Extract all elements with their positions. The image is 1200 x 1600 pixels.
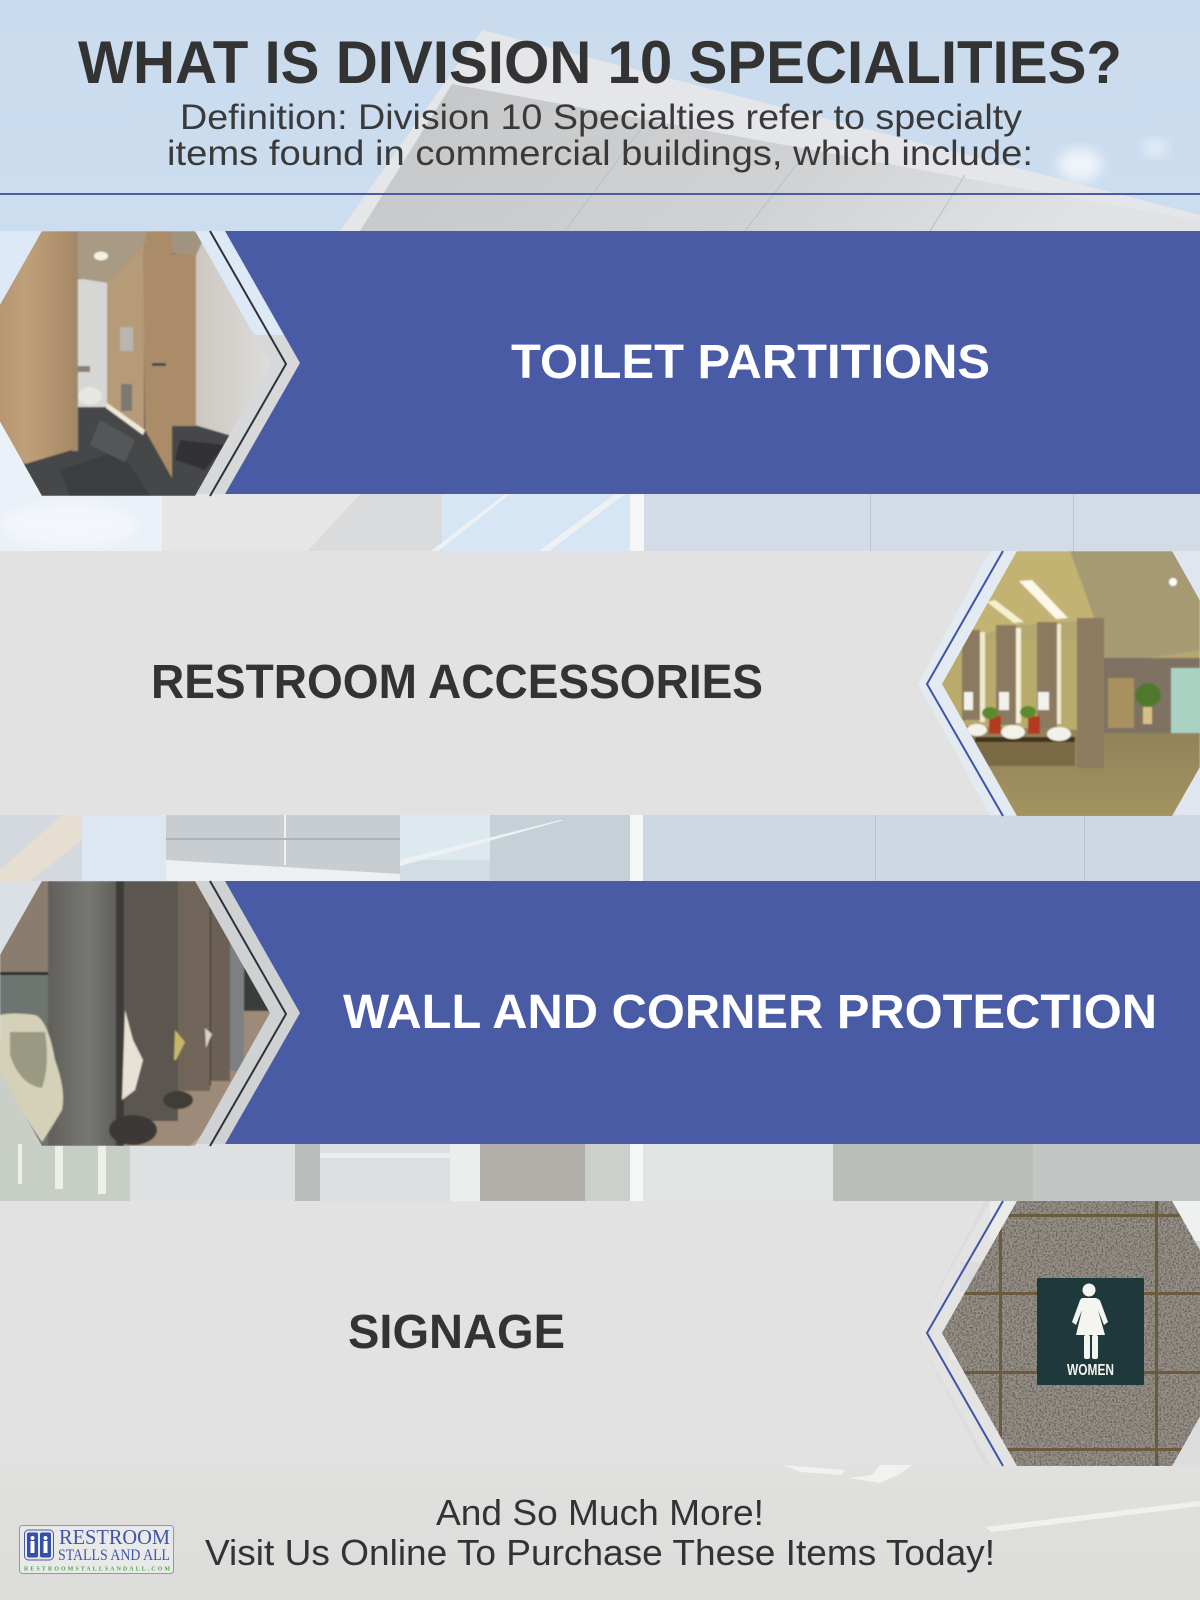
sign plate	[1037, 1278, 1144, 1385]
gray arrow banner	[0, 1201, 985, 1465]
blue arrow banner	[225, 231, 1200, 494]
logo: Restroom Stalls and All: STALLS AND ALL	[58, 1547, 170, 1564]
footer call to action	[205, 1492, 995, 1573]
chevron line	[927, 1201, 1003, 1466]
chevron line	[210, 231, 286, 496]
logo: Restroom Stalls and All	[20, 1525, 174, 1574]
photo: restroom interior	[940, 551, 1200, 821]
photo: urinals	[0, 881, 280, 1146]
logo: Restroom Stalls and All: RESTROOMSTALLSANDALL.COM	[24, 1566, 170, 1572]
chevron line	[210, 881, 286, 1146]
header divider line	[0, 193, 1200, 195]
icon: restroom doors	[24, 1530, 54, 1560]
photo: toilet stall	[0, 231, 254, 496]
subtitle: definition: items found in commercial buildings, which include:	[167, 134, 1033, 173]
chevron line	[927, 551, 1003, 816]
gray arrow banner	[0, 551, 990, 815]
icon: woman figure	[1072, 1284, 1108, 1359]
subtitle: definition: Definition: Division 10 Specialties refer to specialty	[180, 98, 1023, 137]
blue arrow banner	[225, 881, 1200, 1144]
title: WHAT IS DIVISION 10 SPECIALITIES?	[78, 29, 1122, 96]
panel: signage	[0, 1201, 1200, 1467]
label: WALL AND CORNER PROTECTION	[343, 986, 1157, 1039]
footer call to action: And So Much More!	[436, 1492, 764, 1533]
panel: toilet partitions	[0, 231, 1200, 496]
photo: women sign on stone wall	[940, 1201, 1200, 1467]
logo: Restroom Stalls and All: RESTROOM	[59, 1525, 170, 1549]
panel: restroom accessories	[0, 551, 1200, 821]
label: SIGNAGE	[348, 1306, 565, 1359]
label: RESTROOM ACCESSORIES	[151, 656, 763, 709]
label: TOILET PARTITIONS	[511, 336, 990, 389]
footer call to action: Visit Us Online To Purchase These Items Today!	[205, 1532, 995, 1573]
translucent chevrons behind hexagon photos	[915, 551, 1017, 1466]
subtitle: definition	[167, 98, 1033, 173]
panel: wall and corner protection	[0, 881, 1200, 1146]
photo: women sign on stone wall: WOMEN	[1067, 1362, 1114, 1379]
